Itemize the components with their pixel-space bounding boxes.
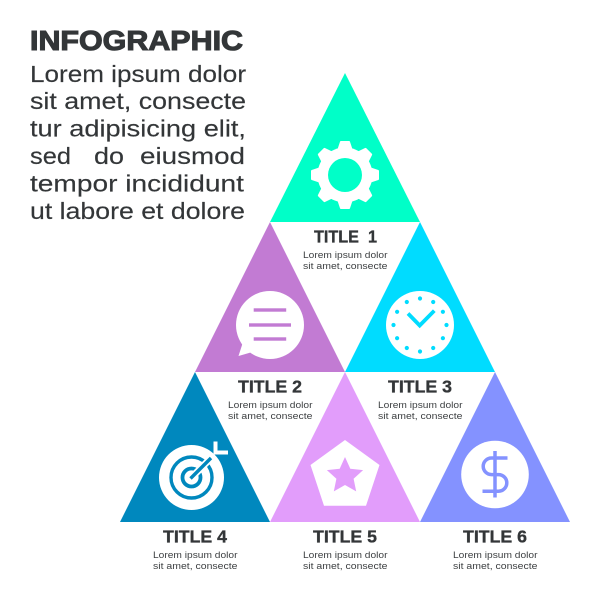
triangle 3: clock <box>345 222 495 372</box>
caption 6 <box>453 527 538 572</box>
triangle 5: pentagon star <box>270 372 420 522</box>
intro text block: eiusmod <box>140 143 245 169</box>
caption 3: Lorem ipsum dolor <box>378 400 463 411</box>
triangle 4: target <box>120 372 270 522</box>
caption 4: sit amet, consecte <box>153 561 238 572</box>
icon: dollar <box>461 441 529 508</box>
caption 1: Lorem ipsum dolor <box>303 250 388 261</box>
intro text block: ut labore et dolore <box>30 198 245 224</box>
caption 5: TITLE 5 <box>313 527 377 547</box>
icon: speech bubble <box>236 291 304 359</box>
caption 3 <box>378 377 463 422</box>
caption 1 <box>303 227 388 272</box>
intro text block: tempor incididunt <box>30 170 245 196</box>
caption 5 <box>303 527 388 572</box>
caption 2: Lorem ipsum dolor <box>228 400 313 411</box>
icon: pentagon star <box>310 440 380 506</box>
caption 2: sit amet, consecte <box>228 411 312 422</box>
triangle 6: dollar <box>420 372 570 522</box>
caption 1: sit amet, consecte <box>303 261 388 272</box>
triangle 2: speech bubble <box>195 222 345 372</box>
caption 4: TITLE 4 <box>163 527 227 547</box>
triangle 1: gear <box>270 73 420 222</box>
intro text block: sit amet, consecte <box>30 88 246 114</box>
caption 6: Lorem ipsum dolor <box>453 550 538 561</box>
caption 2 <box>228 377 313 422</box>
caption 5: sit amet, consecte <box>303 561 388 572</box>
intro text block: sed <box>30 143 71 169</box>
title: INFOGRAPHIC <box>30 25 243 56</box>
caption 1: TITLE 1 <box>314 227 377 247</box>
intro text block: do <box>94 143 124 169</box>
caption 6: sit amet, consecte <box>453 561 538 572</box>
caption 2: TITLE 2 <box>238 377 302 397</box>
intro text block: tur adipisicing elit, <box>30 116 246 142</box>
icon: target <box>159 442 228 510</box>
caption 5: Lorem ipsum dolor <box>303 550 388 561</box>
intro text block: Lorem ipsum dolor <box>30 61 246 87</box>
caption 6: TITLE 6 <box>463 527 527 547</box>
caption 3: TITLE 3 <box>388 377 452 397</box>
caption 3: sit amet, consecte <box>378 411 462 422</box>
icon: clock <box>386 291 454 359</box>
icon: gear <box>312 142 378 208</box>
caption 4 <box>153 527 238 572</box>
intro text block <box>30 61 246 224</box>
caption 4: Lorem ipsum dolor <box>153 550 238 561</box>
